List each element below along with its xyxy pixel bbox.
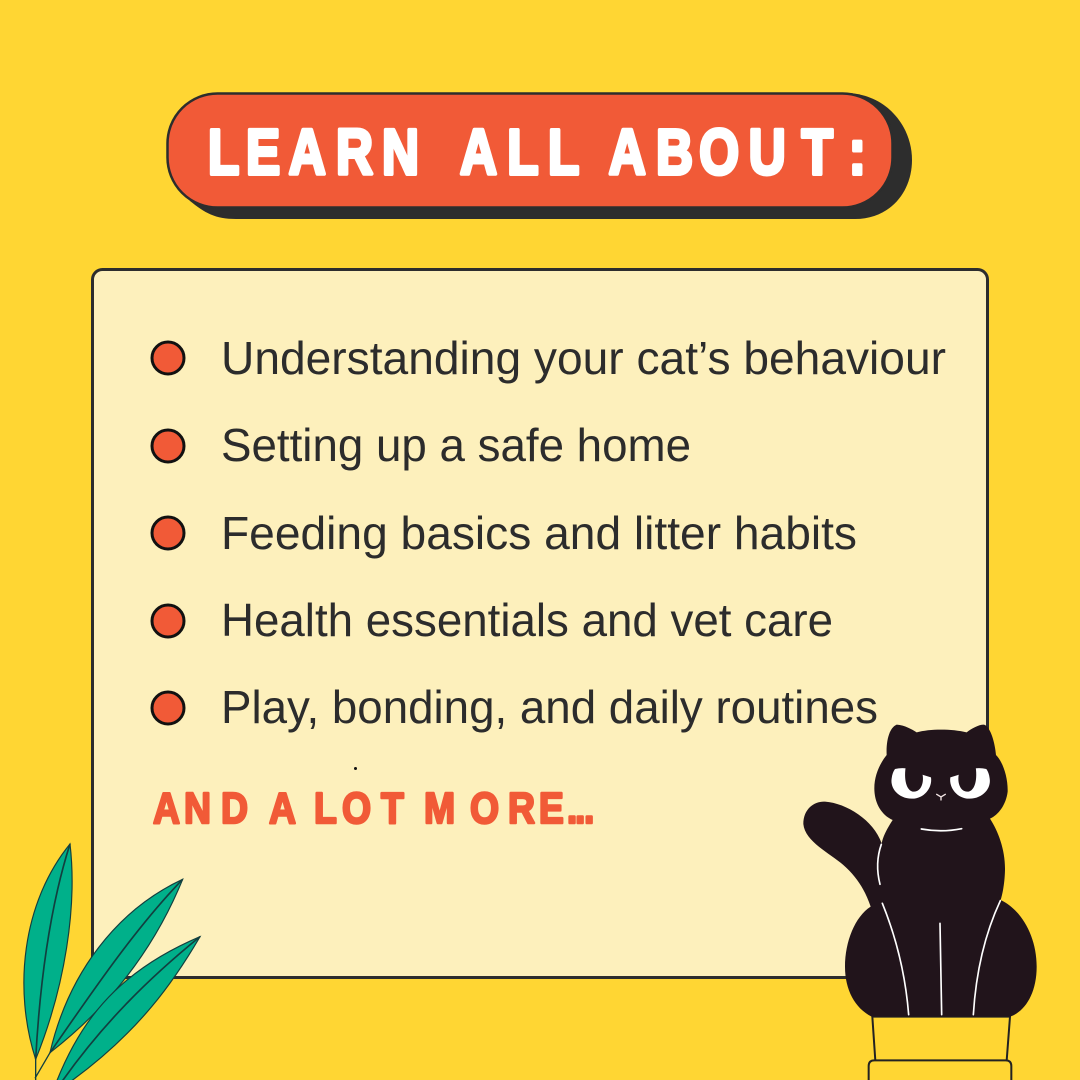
cat body <box>803 725 1037 1017</box>
list item 1: Understanding your cat’s behaviour <box>221 332 946 384</box>
title text: LEARN ALL ABOUT: <box>208 118 866 188</box>
main panel <box>92 270 988 978</box>
list item 3: Feeding basics and litter habits <box>221 507 857 559</box>
illustration: black cat on pot <box>803 725 1037 1080</box>
icon: plant leaves <box>24 844 200 1080</box>
banner shadow <box>170 93 912 219</box>
list item 5: Play, bonding, and daily routines <box>221 681 878 733</box>
leaf 2 <box>50 879 183 1053</box>
banner pill <box>168 94 892 208</box>
pot <box>869 1017 1011 1080</box>
cat face and body lines <box>878 794 1000 1015</box>
leaf 3 <box>53 937 200 1080</box>
list item 2: Setting up a safe home <box>221 419 691 471</box>
closing text: AND A LOT MORE... <box>153 783 594 833</box>
title banner <box>168 93 912 219</box>
leaf 1 <box>24 844 72 1059</box>
cat eyes <box>891 767 990 799</box>
list item 4: Health essentials and vet care <box>221 594 833 646</box>
bullet list <box>152 332 946 733</box>
